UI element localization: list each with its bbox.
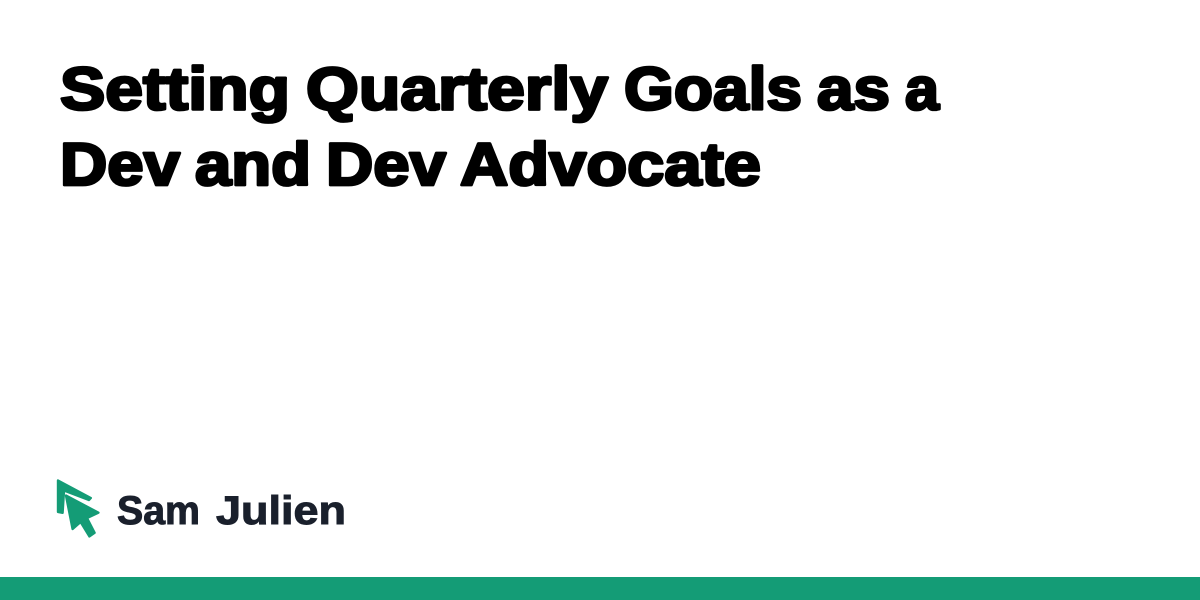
title: Dev [60, 131, 181, 198]
title: Goals [624, 56, 802, 122]
title: Setting [60, 56, 290, 122]
title: and [195, 131, 311, 198]
brand name: Julien [216, 489, 346, 533]
brand name: Sam [117, 489, 200, 533]
title: Quarterly [306, 56, 609, 122]
title: Dev [326, 131, 447, 198]
title [60, 56, 940, 198]
icon: green cursor logo [58, 480, 98, 536]
title: as [817, 56, 890, 122]
brand name [117, 489, 346, 533]
title: a [905, 56, 940, 122]
title: Advocate [460, 131, 761, 198]
footer bar [0, 577, 1200, 600]
